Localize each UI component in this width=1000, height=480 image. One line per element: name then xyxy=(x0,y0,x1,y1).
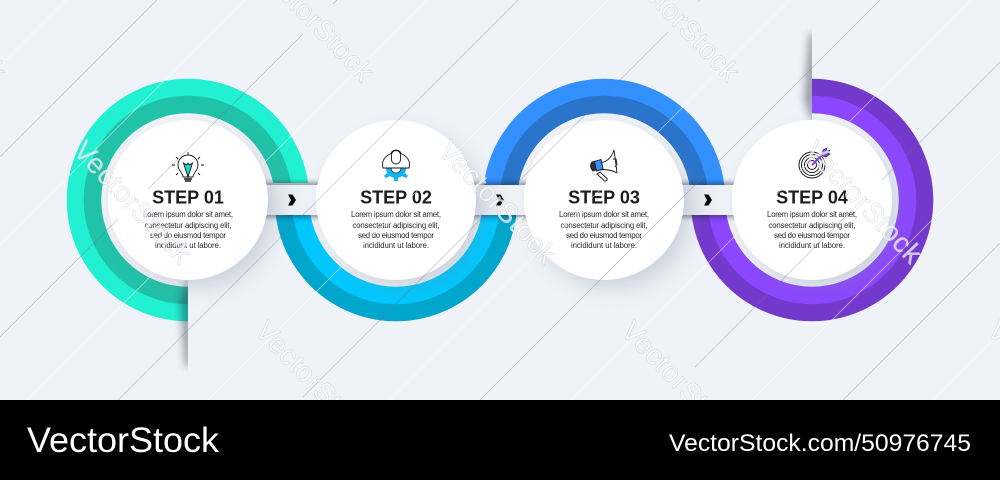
icon: megaphone xyxy=(591,150,617,181)
body text: incididunt ut labore. xyxy=(155,241,221,250)
connector bands xyxy=(258,185,742,215)
body text: sed do eiusmod tempor xyxy=(358,231,434,240)
body text xyxy=(143,210,233,250)
icon: target and arrow xyxy=(799,148,830,178)
step 04 card xyxy=(732,120,892,280)
heading: STEP 03 xyxy=(568,188,640,208)
heading: STEP 04 xyxy=(776,188,848,208)
footer logo: VectorStock xyxy=(27,421,220,460)
body text: sed do eiusmod tempor xyxy=(774,231,850,240)
connector band shadows xyxy=(262,182,738,218)
watermarks: VectorStock xyxy=(616,315,746,450)
body text: Lorem ipsum dolor sit amet, xyxy=(351,210,441,219)
watermarks: VectorStock xyxy=(799,135,929,270)
body text: Lorem ipsum dolor sit amet, xyxy=(559,210,649,219)
step 01 card xyxy=(108,120,268,280)
body text: Lorem ipsum dolor sit amet, xyxy=(767,210,857,219)
body text: incididunt ut labore. xyxy=(779,241,845,250)
body text: consectetur adipiscing elit, xyxy=(560,221,648,230)
icon: helmet and gear xyxy=(382,150,410,181)
body text: incididunt ut labore. xyxy=(571,241,637,250)
body text: incididunt ut labore. xyxy=(363,241,429,250)
icon: light bulb xyxy=(172,152,204,181)
footer url: VectorStock.com/50976745 xyxy=(669,430,971,457)
body text: Lorem ipsum dolor sit amet, xyxy=(143,210,233,219)
footer bar xyxy=(0,400,1000,480)
chevron arrows xyxy=(288,194,712,206)
fold shadow: step 01 xyxy=(180,278,192,366)
body text xyxy=(559,210,649,250)
watermarks: VectorStock xyxy=(68,135,198,270)
circle shadows xyxy=(119,132,899,288)
body text: consectetur adipiscing elit, xyxy=(144,221,232,230)
step 02 card xyxy=(316,120,476,280)
heading: STEP 01 xyxy=(152,188,224,208)
step 03 card xyxy=(524,120,684,280)
step 03 ring xyxy=(484,78,724,185)
step 01 ring xyxy=(76,88,300,312)
body text: sed do eiusmod tempor xyxy=(150,231,226,240)
watermarks: VectorStock xyxy=(433,135,563,270)
body text xyxy=(767,210,857,250)
step 04 ring xyxy=(700,88,924,312)
body text: sed do eiusmod tempor xyxy=(566,231,642,240)
fold shadow: step 04 xyxy=(804,34,816,122)
body text: consectetur adipiscing elit, xyxy=(352,221,440,230)
heading: STEP 02 xyxy=(360,188,432,208)
step 02 ring xyxy=(276,215,516,322)
body text: consectetur adipiscing elit, xyxy=(768,221,856,230)
body text xyxy=(351,210,441,250)
watermarks: VectorStock xyxy=(250,315,380,450)
